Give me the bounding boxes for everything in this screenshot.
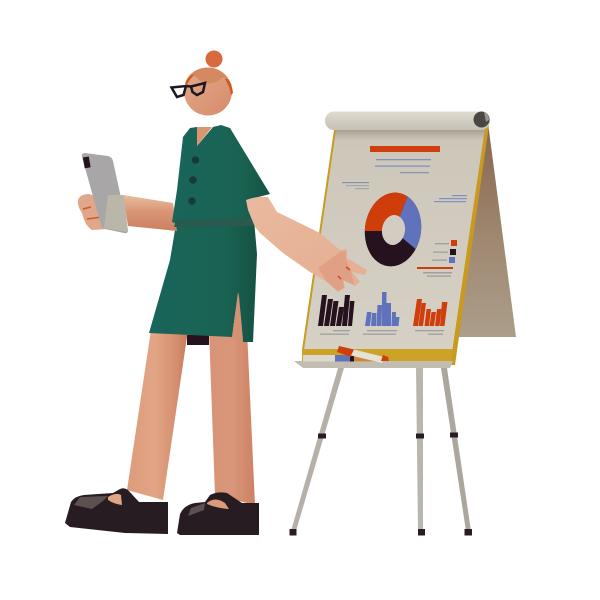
donut chart [364,192,422,266]
easel stand [290,368,472,536]
glasses [172,83,205,97]
easel leg: middle [416,368,425,536]
button: bottom [188,197,196,205]
illustration: woman presenting a flip chart [65,50,516,536]
flip chart board edge [450,125,489,365]
donut segment: blue [400,196,422,249]
blouse [172,125,270,227]
marker: red [337,346,389,363]
face [184,68,232,116]
flip chart back panel [458,123,516,337]
legend note lines [417,267,453,277]
left note lines [342,182,369,189]
left leg [127,330,188,500]
neck opening [195,127,212,146]
bar chart: blue captions [363,330,397,335]
paper roll [325,112,490,130]
button: middle [189,176,197,184]
hair fringe [185,74,233,95]
bar chart: black [318,295,354,326]
phone lower panel [104,195,128,232]
finger accent [83,207,102,219]
donut hole [380,214,407,246]
chart heading bar [370,146,440,152]
hand behind phone [78,194,108,230]
hair [185,68,232,86]
donut legend [432,240,457,263]
marker tray [294,361,453,368]
yellow board edge left [302,130,336,350]
hair bun [206,50,222,68]
donut segment: red [364,192,408,231]
arm: pointing with hand [246,197,367,292]
right shoe [177,492,259,535]
right leg [209,330,255,505]
left shoe [65,488,168,534]
skirt slit [232,292,243,340]
easel leg: left [290,368,344,536]
bar chart: black captions [320,330,350,335]
markers [303,346,389,363]
bar chart: red captions [415,330,444,335]
bar chart: blue [365,292,400,326]
underskirt [187,335,209,345]
skirt [149,220,257,342]
button: top [192,156,199,164]
phone and hand [78,153,128,233]
arm: phone side [123,195,177,231]
donut segment: black [360,189,426,270]
heading text lines [375,159,431,173]
bar chart: red [413,299,448,326]
head [172,50,233,116]
flip chart paper [302,128,485,350]
easel leg: right [441,368,472,536]
phone camera [83,156,91,168]
phone [82,153,128,233]
yellow bottom strip [302,349,453,364]
right note lines [434,195,467,202]
marker: blue [303,355,376,362]
waist band [174,218,254,227]
